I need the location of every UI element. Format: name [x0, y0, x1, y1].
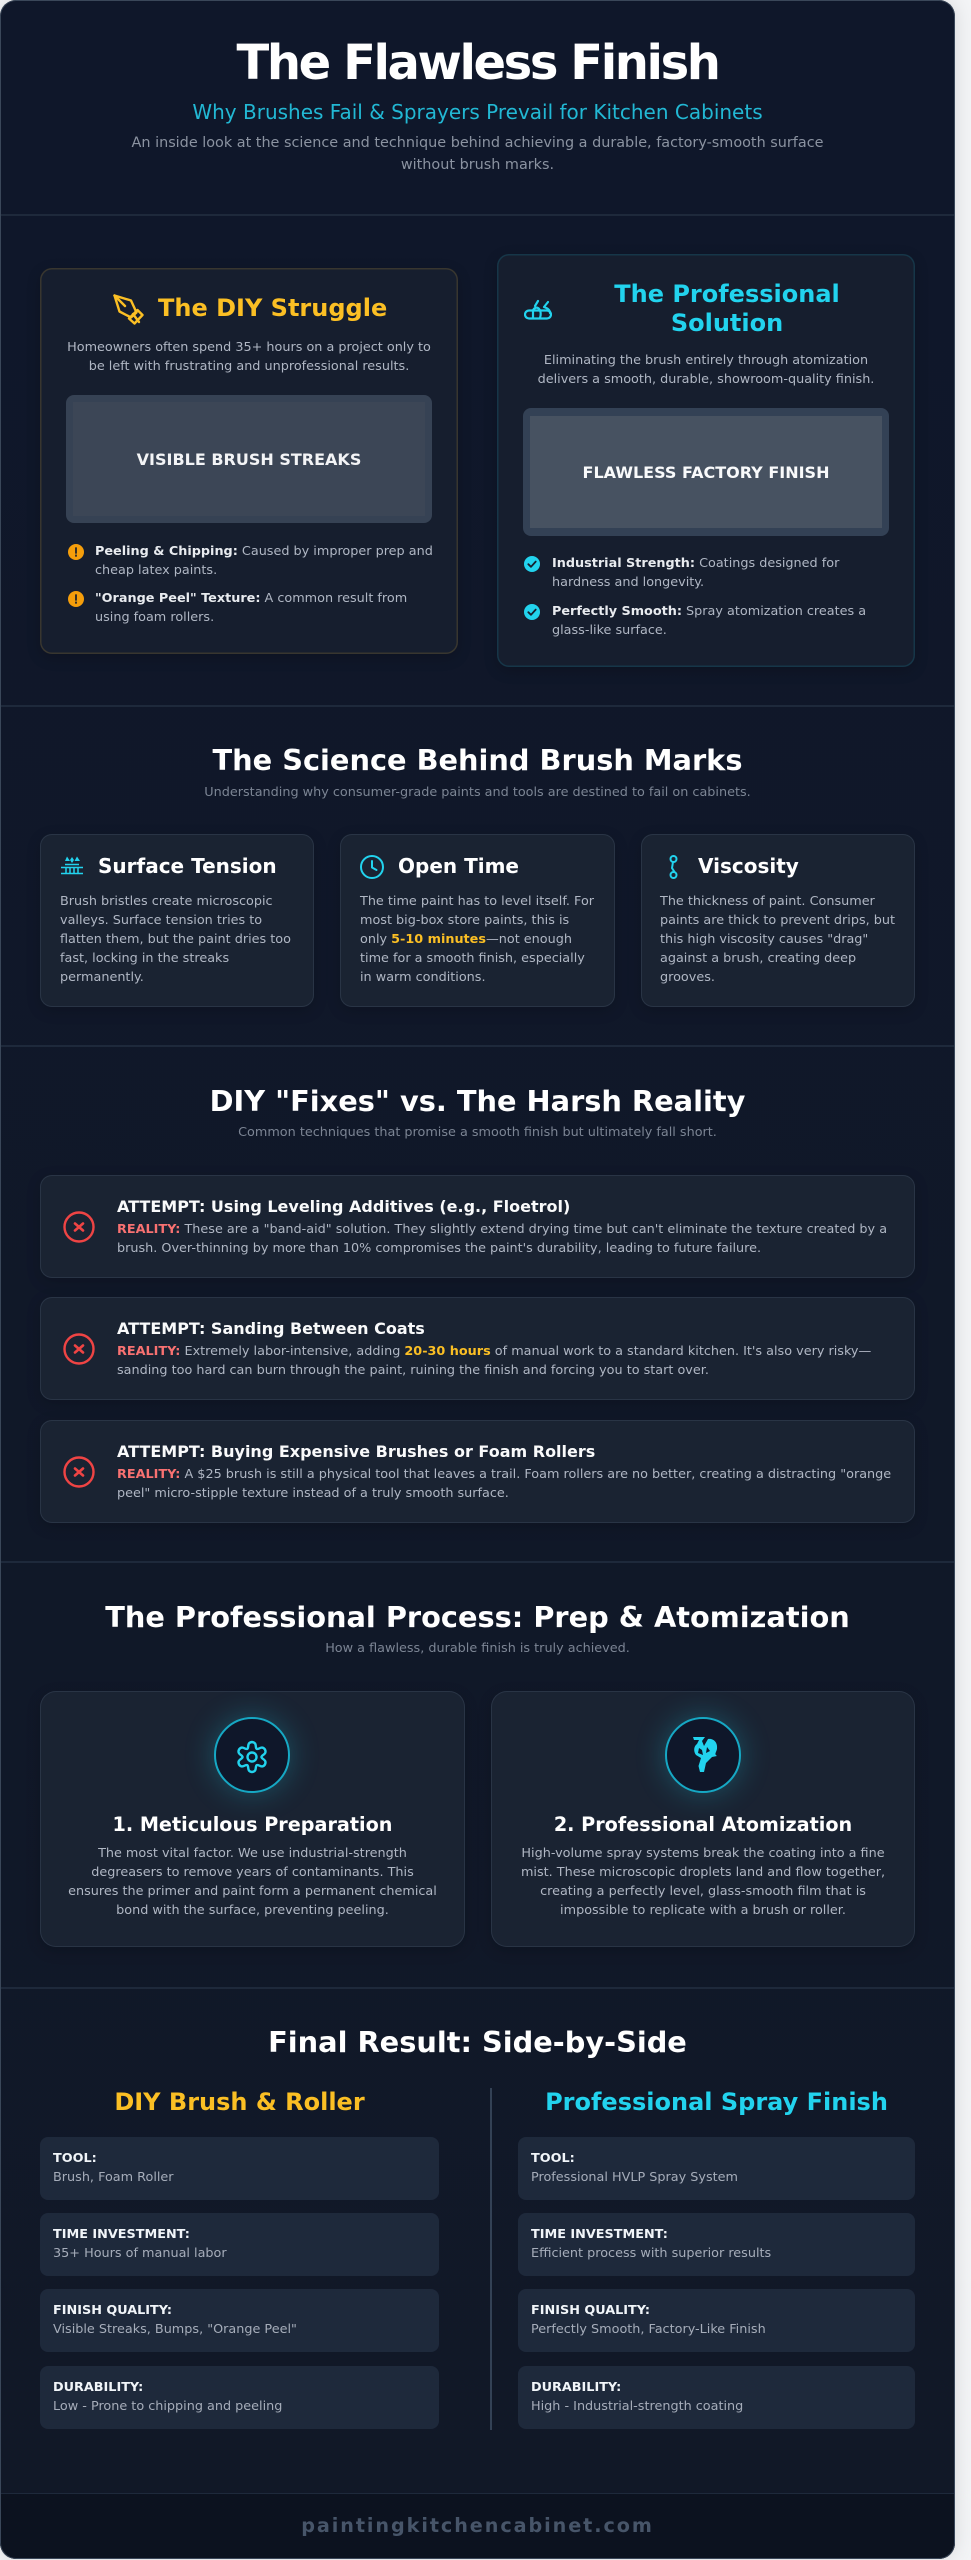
point: orange peel: using foam rollers. [95, 610, 214, 625]
card: viscosity [641, 834, 915, 1007]
attempt title: ATTEMPT: Sanding Between Coats [117, 1319, 425, 1338]
card: meticulous preparation [40, 1691, 465, 1947]
row: durability: DURABILITY: [53, 2380, 143, 2395]
row: time investment: TIME INVESTMENT: [53, 2227, 190, 2242]
row: time investment: Efficient process with superior results [531, 2246, 771, 2261]
row: finish quality: Visible Streaks, Bumps, "Orange Peel" [53, 2322, 297, 2337]
card text: most big-box store paints, this is [360, 913, 569, 928]
description: be left with frustrating and unprofessional results. [89, 359, 409, 374]
row: durability [518, 2366, 915, 2429]
card text: in warm conditions. [360, 970, 486, 985]
step text: degreasers to remove years of contaminants. This [91, 1865, 414, 1880]
card text: time for a smooth finish, especially [360, 951, 585, 966]
title: The Flawless Finish [236, 35, 719, 91]
icon: warning [68, 591, 84, 607]
row: tool: Professional HVLP Spray System [531, 2170, 738, 2185]
reality text: REALITY: Extremely labor-intensive, adding 20-30 hours of manual work to a standard kitchen. It's also very risky— [117, 1344, 871, 1359]
footer [0, 2493, 955, 2560]
reality text: sanding too hard can burn through the paint, ruining the finish and forcing you to start over. [117, 1363, 709, 1378]
intro text: without brush marks. [401, 157, 554, 173]
section: the professional process [1, 1600, 954, 1989]
heading: Final Result: Side-by-Side [268, 2025, 687, 2059]
step text: bond with the surface, preventing peeling. [116, 1903, 389, 1918]
card text: Brush bristles create microscopic [60, 894, 273, 909]
heading: Solution [671, 309, 783, 337]
point: industrial strength: Industrial Strength: Coatings designed for [552, 556, 839, 571]
step title: 1. Meticulous Preparation [113, 1813, 392, 1836]
point: peeling [95, 544, 433, 578]
section: final result side by side [40, 2025, 915, 2430]
row: durability: High - Industrial-strength coating [531, 2399, 743, 2414]
row: durability [40, 2366, 439, 2429]
section: DIY vs professional comparison [1, 254, 954, 707]
reality text: brush. Over-thinning by more than 10% compromises the paint's durability, leading to future failure. [117, 1241, 761, 1256]
row: finish quality: Perfectly Smooth, Factory-Like Finish [531, 2322, 766, 2337]
heading: The Professional [614, 280, 840, 308]
icon: check [524, 556, 540, 572]
card text: The thickness of paint. Consumer [660, 894, 875, 909]
card text: this high viscosity causes "drag" [660, 932, 868, 947]
card text: against a brush, creating deep [660, 951, 856, 966]
footer domain: paintingkitchencabinet.com [301, 2514, 654, 2537]
card: expensive brushes [40, 1420, 915, 1523]
card text: paints are thick to prevent drips, but [660, 913, 895, 928]
card text: permanently. [60, 970, 144, 985]
point: peeling: cheap latex paints. [95, 563, 217, 578]
card text [660, 894, 895, 985]
step text: ensures the primer and paint form a permanent chemical [68, 1884, 437, 1899]
row: tool: Brush, Foam Roller [53, 2170, 174, 2185]
intro text: An inside look at the science and technique behind achieving a durable, factory-smooth surface [132, 135, 823, 151]
row: finish quality [518, 2289, 915, 2352]
row: tool [518, 2137, 915, 2200]
point: industrial strength: hardness and longevity. [552, 575, 704, 590]
step text: mist. These microscopic droplets land and flow together, [521, 1865, 885, 1880]
step text: impossible to replicate with a brush or roller. [560, 1903, 846, 1918]
visual: brush streaks swatch [66, 395, 432, 523]
panel: the professional solution [497, 254, 915, 667]
card text: grooves. [660, 970, 715, 985]
heading [614, 280, 840, 337]
row: finish quality: FINISH QUALITY: [53, 2303, 172, 2318]
row: finish quality: FINISH QUALITY: [531, 2303, 650, 2318]
step text [521, 1846, 885, 1918]
reality text [117, 1467, 891, 1501]
row: time investment: 35+ Hours of manual labor [53, 2246, 227, 2261]
step text [68, 1846, 437, 1918]
row: tool [40, 2137, 439, 2200]
point: perfectly smooth [552, 604, 866, 638]
point: peeling: Peeling & Chipping: Caused by improper prep and [95, 544, 433, 559]
row: time investment [40, 2213, 439, 2276]
panel: the DIY struggle [40, 268, 458, 654]
icon: warning [68, 544, 84, 560]
column: DIY brush and roller [40, 2088, 439, 2429]
card: leveling additives [40, 1175, 915, 1278]
reality text: REALITY: These are a "band-aid" solution. They slightly extend drying time but can't eliminate the texture created by a [117, 1222, 887, 1237]
reality text [117, 1344, 871, 1378]
heading: The Professional Process: Prep & Atomization [105, 1600, 850, 1634]
step text: The most vital factor. We use industrial-strength [98, 1846, 407, 1861]
reality text: REALITY: A $25 brush is still a physical tool that leaves a trail. Foam rollers are no better, creating a distracting "orange [117, 1467, 891, 1482]
reality text: peel" micro-stipple texture instead of a truly smooth surface. [117, 1486, 509, 1501]
description [67, 340, 431, 374]
attempt title: ATTEMPT: Buying Expensive Brushes or Foam Rollers [117, 1442, 595, 1461]
subheading: Common techniques that promise a smooth finish but ultimately fall short. [238, 1125, 717, 1140]
subheading: How a flawless, durable finish is truly achieved. [325, 1641, 630, 1656]
card title: Surface Tension [98, 854, 277, 878]
icon: check [524, 604, 540, 620]
icon: x mark [63, 1211, 95, 1243]
point: perfectly smooth: glass-like surface. [552, 623, 667, 638]
section: header [1, 35, 954, 216]
card text: only 5-10 minutes—not enough [360, 932, 572, 947]
section: DIY fixes vs harsh reality [1, 1084, 954, 1563]
row: tool: TOOL: [53, 2151, 97, 2166]
point: industrial strength [552, 556, 840, 590]
card: surface tension [40, 834, 314, 1007]
swatch label: VISIBLE BRUSH STREAKS [137, 450, 361, 469]
icon: spray gun [524, 300, 552, 320]
card text: fast, locking in the streaks [60, 951, 229, 966]
step title: 2. Professional Atomization [554, 1813, 852, 1836]
row: time investment: TIME INVESTMENT: [531, 2227, 668, 2242]
icon: x mark [63, 1333, 95, 1365]
visual: factory finish swatch [523, 408, 889, 536]
icon: clock [360, 855, 384, 879]
intro text [132, 135, 823, 173]
icon: x mark [63, 1456, 95, 1488]
card title: Viscosity [698, 854, 799, 878]
point: orange peel [95, 591, 407, 625]
description: Eliminating the brush entirely through atomization [544, 353, 868, 368]
subheading: Understanding why consumer-grade paints and tools are destined to fail on cabinets. [204, 785, 751, 800]
card text [360, 894, 594, 985]
heading: The Science Behind Brush Marks [213, 743, 742, 777]
swatch label: FLAWLESS FACTORY FINISH [583, 463, 829, 482]
point: perfectly smooth: Perfectly Smooth: Spray atomization creates a [552, 604, 866, 619]
card: sanding [40, 1297, 915, 1400]
description: Homeowners often spend 35+ hours on a project only to [67, 340, 431, 355]
description: delivers a smooth, durable, showroom-quality finish. [538, 372, 874, 387]
heading: The DIY Struggle [158, 294, 387, 322]
icon: pen nib [113, 294, 144, 325]
row: finish quality [40, 2289, 439, 2352]
section: the science behind brush marks [1, 743, 954, 1047]
column title: Professional Spray Finish [545, 2088, 888, 2116]
row: time investment [518, 2213, 915, 2276]
card text: The time paint has to level itself. For [360, 894, 594, 909]
card text: valleys. Surface tension tries to [60, 913, 262, 928]
card: open time [340, 834, 615, 1007]
step text: creating a perfectly level, glass-smooth film that is [540, 1884, 866, 1899]
icon: gear in glowing circle [214, 1717, 290, 1793]
attempt title: ATTEMPT: Using Leveling Additives (e.g., Floetrol) [117, 1197, 570, 1216]
reality text [117, 1222, 887, 1256]
column: professional spray finish [518, 2088, 915, 2429]
icon: surface tension [61, 856, 83, 874]
icon: spray in glowing circle [665, 1717, 741, 1793]
row: durability: Low - Prone to chipping and peeling [53, 2399, 282, 2414]
row: tool: TOOL: [531, 2151, 575, 2166]
description [538, 353, 874, 387]
column title: DIY Brush & Roller [114, 2088, 365, 2116]
card title: Open Time [398, 854, 519, 878]
card text [60, 894, 291, 985]
card: professional atomization [491, 1691, 915, 1947]
step text: High-volume spray systems break the coating into a fine [521, 1846, 885, 1861]
point: orange peel: "Orange Peel" Texture: A common result from [95, 591, 407, 606]
heading: DIY "Fixes" vs. The Harsh Reality [210, 1084, 745, 1118]
card text: flatten them, but the paint dries too [60, 932, 291, 947]
icon: viscosity [670, 855, 678, 879]
row: durability: DURABILITY: [531, 2380, 621, 2395]
subtitle: Why Brushes Fail & Sprayers Prevail for Kitchen Cabinets [192, 100, 763, 124]
